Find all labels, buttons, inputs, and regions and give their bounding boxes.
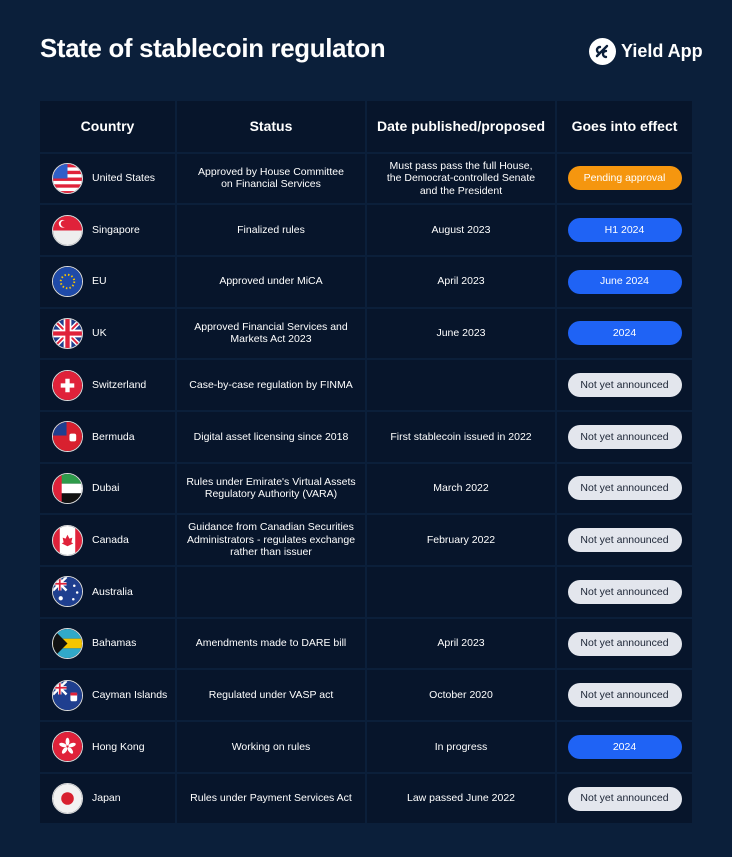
row: Japan: Rules under Payment Services Act [190,792,352,804]
row: Bermuda: Not yet announced [580,431,669,443]
row: Japan: Law passed June 2022 [407,792,515,804]
row: UK: Approved Financial Services and [194,321,348,333]
row: EU: Approved under MiCA [219,275,323,287]
row: Cayman Islands: Not yet announced [580,689,669,701]
row: Hong Kong: Hong Kong [92,741,145,753]
row: Singapore: August 2023 [432,224,490,236]
row: United States: on Financial Services [221,178,321,190]
row: Canada: February 2022 [427,534,495,546]
row: EU: EU [92,275,107,287]
row: Singapore [40,205,692,255]
row: United States: Approved by House Committee [198,166,344,178]
row: Bermuda: Bermuda [92,431,135,443]
row: Switzerland: Case-by-case regulation by FINMA [189,379,353,391]
row: Cayman Islands: Regulated under VASP act [209,689,333,701]
row: Dubai [40,464,692,513]
row: Australia [40,567,692,617]
header row: Country [81,118,134,134]
row: EU [40,257,692,307]
row: Canada: rather than issuer [230,546,312,558]
row: Dubai: Rules under Emirate's Virtual Assets [186,476,356,488]
row: UK [40,309,692,358]
header row: Status [250,118,292,134]
row: Singapore: H1 2024 [605,224,644,236]
row: UK: Markets Act 2023 [230,333,312,345]
row: Cayman Islands: Cayman Islands [92,689,167,701]
row: United States: and the President [420,185,502,197]
header row: Goes into effect [572,118,677,134]
row: Bermuda [40,412,692,462]
row: EU: June 2024 [600,275,649,287]
row: Canada: Not yet announced [580,534,669,546]
row: Switzerland [40,360,692,410]
row: Bahamas: Bahamas [92,637,136,649]
row: Japan: Japan [92,792,121,804]
row: Bahamas: Not yet announced [580,637,669,649]
row: Hong Kong: Working on rules [232,741,310,753]
row: Bahamas: Amendments made to DARE bill [196,637,346,649]
row: United States [40,154,692,203]
row: Dubai: Regulatory Authority (VARA) [205,488,337,500]
row: United States: United States [92,172,155,184]
row: Hong Kong: In progress [435,741,487,753]
row: Hong Kong [40,722,692,772]
row: Switzerland: Not yet announced [580,379,669,391]
row: Canada: Guidance from Canadian Securities [188,521,354,533]
row: UK: June 2023 [436,327,486,339]
title: State of stablecoin regulaton [40,35,385,63]
row: UK: UK [92,327,107,339]
row: Canada [40,515,692,565]
row: Bermuda: Digital asset licensing since 2018 [194,431,348,443]
row: Switzerland: Switzerland [92,379,146,391]
row: Dubai: March 2022 [433,482,489,494]
row: Singapore: Finalized rules [237,224,305,236]
row: Canada: Canada [92,534,129,546]
row: Japan [40,774,692,823]
header row [40,101,692,152]
row: Singapore: Singapore [92,224,140,236]
row: Australia: Australia [92,586,133,598]
row: EU: April 2023 [437,275,485,287]
row: Bermuda: First stablecoin issued in 2022 [390,431,532,443]
row: Bahamas: April 2023 [437,637,485,649]
row: Dubai: Dubai [92,482,119,494]
row: Canada: Administrators - regulates exchange [187,534,355,546]
logo: Yield App [621,41,703,61]
row: Japan: Not yet announced [580,792,669,804]
row: UK: 2024 [613,327,636,339]
row: Australia: Not yet announced [580,586,669,598]
logo [589,38,703,65]
row: Cayman Islands [40,670,692,720]
header row: Date published/proposed [377,118,545,134]
row: Cayman Islands: October 2020 [429,689,493,701]
row: Bahamas [40,619,692,668]
row: United States: Pending approval [584,172,665,184]
row: Dubai: Not yet announced [580,482,669,494]
table [40,101,692,823]
row: Hong Kong: 2024 [613,741,636,753]
row: United States: the Democrat-controlled Senate [387,172,535,184]
row: United States: Must pass pass the full House, [390,160,532,172]
